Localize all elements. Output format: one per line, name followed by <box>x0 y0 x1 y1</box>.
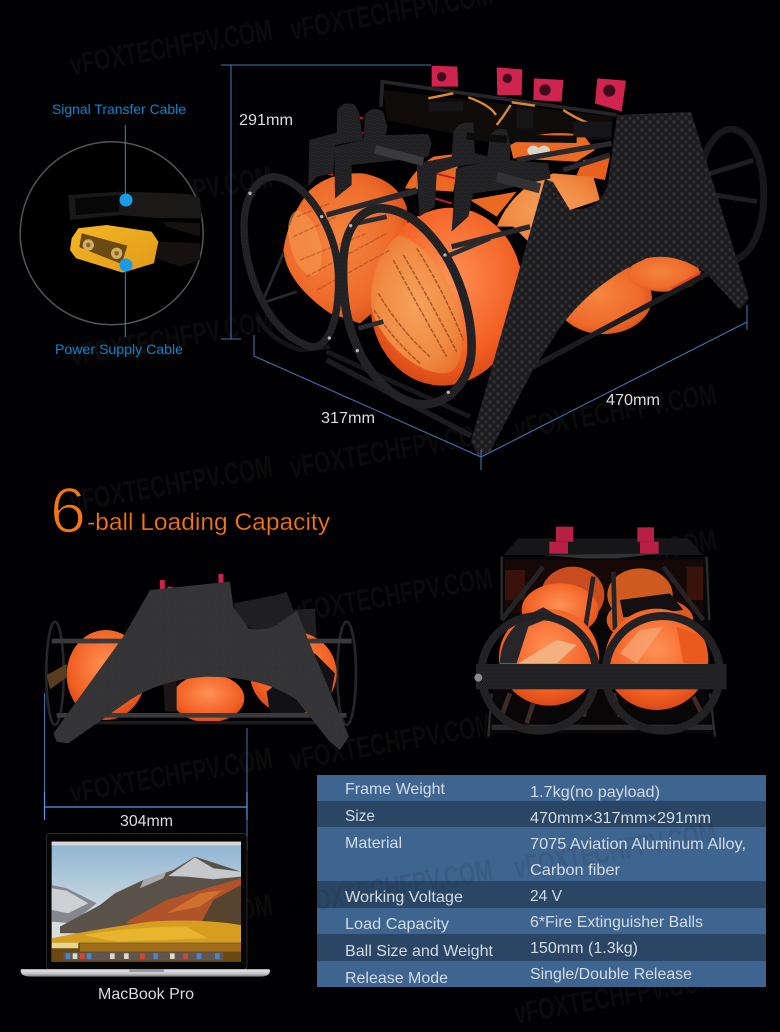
brackets and rods <box>308 103 612 247</box>
table text: Frame Weight <box>345 781 446 798</box>
watermarks: vFOXTECHFPV.COM <box>67 451 275 519</box>
red mounts <box>549 527 659 554</box>
printed text on balls <box>293 203 463 363</box>
red mounts <box>432 66 626 112</box>
watermarks: vFOXTECHFPV.COM <box>67 742 275 810</box>
carbon side plate <box>471 112 749 456</box>
label: 291mm: 291mm <box>239 112 293 129</box>
watermarks: vFOXTECHFPV.COM <box>287 709 495 777</box>
label: power cable: Power Supply Cable <box>55 341 183 357</box>
rear spokes <box>262 253 297 303</box>
upper frame, balls and brackets <box>381 66 626 247</box>
watermarks: vFOXTECHFPV.COM <box>67 161 275 229</box>
table text: Carbon fiber <box>530 862 621 879</box>
back brackets <box>233 592 317 637</box>
dot: power <box>120 258 132 272</box>
laptop base <box>21 969 270 977</box>
table text: Load Capacity <box>345 916 449 933</box>
table rows <box>317 775 766 987</box>
table text: 1.7kg(no payload) <box>530 784 660 801</box>
label: 317mm: 317mm <box>321 410 375 427</box>
watermarks: vFOXTECHFPV.COM <box>67 889 275 957</box>
icon: XT60 power connector <box>70 225 158 273</box>
balls <box>67 630 337 722</box>
panel: end view photo <box>474 527 727 737</box>
label: 304mm: 304mm <box>120 813 173 830</box>
watermark on table: vFOXTECHFPV.COM <box>287 854 495 922</box>
cross bar <box>476 664 727 689</box>
table text: 6*Fire Extinguisher Balls <box>530 914 703 931</box>
top bar <box>381 82 617 115</box>
panel: specification table <box>287 775 766 987</box>
watermarks: vFOXTECHFPV.COM <box>67 305 275 373</box>
rear balls <box>510 133 595 162</box>
laptop lid <box>46 834 247 970</box>
panel: cable detail <box>20 101 203 357</box>
panel: front view photo <box>46 574 356 750</box>
label: signal cable: Signal Transfer Cable <box>52 101 186 117</box>
icon: signal cable connector <box>68 192 202 267</box>
label: MacBook Pro: MacBook Pro <box>98 986 194 1003</box>
table text: 150mm (1.3kg) <box>530 940 638 957</box>
big six: 6 <box>50 474 86 546</box>
back ring and lower rods <box>326 129 764 436</box>
watermark on table <box>287 817 719 922</box>
table text: 24 V <box>530 888 562 905</box>
red pins <box>316 115 488 203</box>
floor rods <box>492 719 713 735</box>
frame back <box>488 557 710 733</box>
horizontal rods <box>327 143 612 247</box>
rear balls <box>502 553 703 643</box>
heading <box>50 474 330 546</box>
table text: Single/Double Release <box>530 966 692 983</box>
rings <box>244 177 472 404</box>
panel: main frame photo <box>244 66 764 456</box>
table text: 470mm×317mm×291mm <box>530 810 711 827</box>
end rings <box>46 622 356 725</box>
screen wallpaper <box>52 842 241 962</box>
dimension lines <box>221 65 747 470</box>
leader lines <box>124 125 126 337</box>
label: 470mm: 470mm <box>606 392 660 409</box>
top plate <box>503 538 703 555</box>
table text: Size <box>345 808 375 825</box>
carbon plate <box>53 582 349 750</box>
table text: Release Mode <box>345 970 448 987</box>
table text: Material <box>345 835 402 852</box>
red pins <box>162 574 221 592</box>
table text <box>345 781 746 987</box>
icon: MacBook Pro <box>21 834 270 977</box>
watermarks: vFOXTECHFPV.COM <box>287 417 495 485</box>
table text: Ball Size and Weight <box>345 943 494 960</box>
long rods <box>327 192 490 328</box>
figure-eight rings <box>481 616 720 731</box>
detail circle <box>20 142 203 325</box>
heading text: -ball Loading Capacity <box>87 509 330 536</box>
dimension bar <box>44 792 247 820</box>
left and front balls <box>257 173 537 417</box>
rods <box>52 641 352 715</box>
table text: 7075 Aviation Aluminum Alloy, <box>530 836 746 853</box>
watermarks: vFOXTECHFPV.COM <box>287 562 495 630</box>
table text: Working Voltage <box>345 889 463 906</box>
bracket rods <box>375 149 423 162</box>
dot: signal <box>120 194 132 206</box>
front balls <box>499 607 708 710</box>
watermarks: vFOXTECHFPV.COM <box>67 14 275 82</box>
bolt <box>474 674 482 682</box>
carbon brackets <box>308 103 551 232</box>
interior shadow <box>383 90 613 143</box>
dock <box>63 952 223 960</box>
dimension: 304mm <box>44 693 247 850</box>
